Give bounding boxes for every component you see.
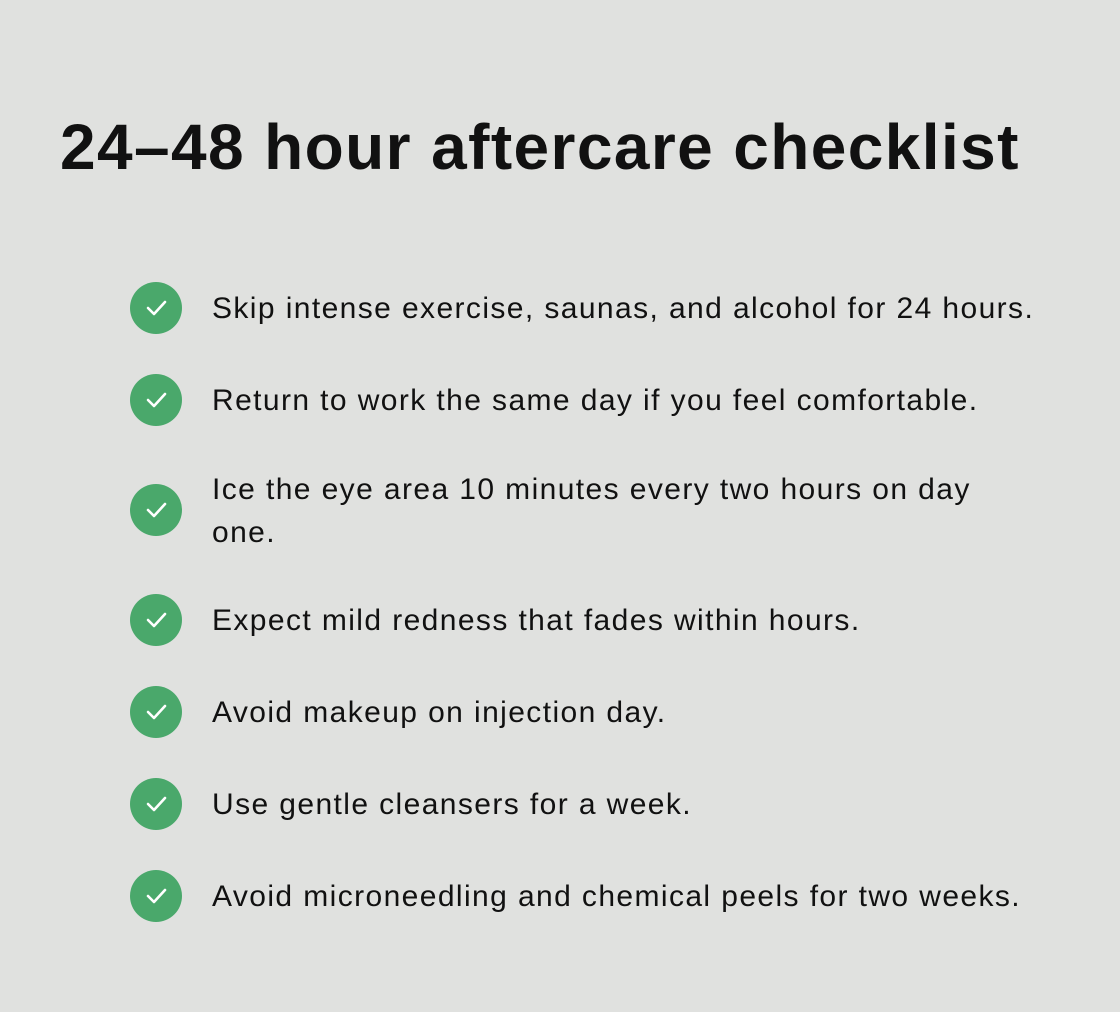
text: Avoid makeup on injection day.: [212, 696, 666, 729]
text: one.: [212, 516, 276, 549]
icon: check: [130, 484, 182, 536]
text: Expect mild redness that fades within hours.: [212, 604, 861, 637]
icon: check: [130, 282, 182, 334]
item 4: [130, 594, 861, 646]
text: Skip intense exercise, saunas, and alcohol for 24 hours.: [212, 292, 1034, 325]
text: Return to work the same day if you feel comfortable.: [212, 384, 978, 417]
text: [212, 473, 971, 549]
icon: check: [130, 686, 182, 738]
title: 24–48 hour aftercare checklist: [60, 111, 1020, 183]
item 3: [130, 473, 971, 549]
text: Use gentle cleansers for a week.: [212, 788, 692, 821]
icon: check: [130, 870, 182, 922]
icon: check: [130, 778, 182, 830]
item 1: [130, 282, 1034, 334]
text: Ice the eye area 10 minutes every two hours on day: [212, 473, 971, 506]
icon: check: [130, 374, 182, 426]
icon: check: [130, 594, 182, 646]
item 6: [130, 778, 692, 830]
item 2: [130, 374, 978, 426]
text: Avoid microneedling and chemical peels for two weeks.: [212, 880, 1021, 913]
item 7: [130, 870, 1021, 922]
item 5: [130, 686, 666, 738]
